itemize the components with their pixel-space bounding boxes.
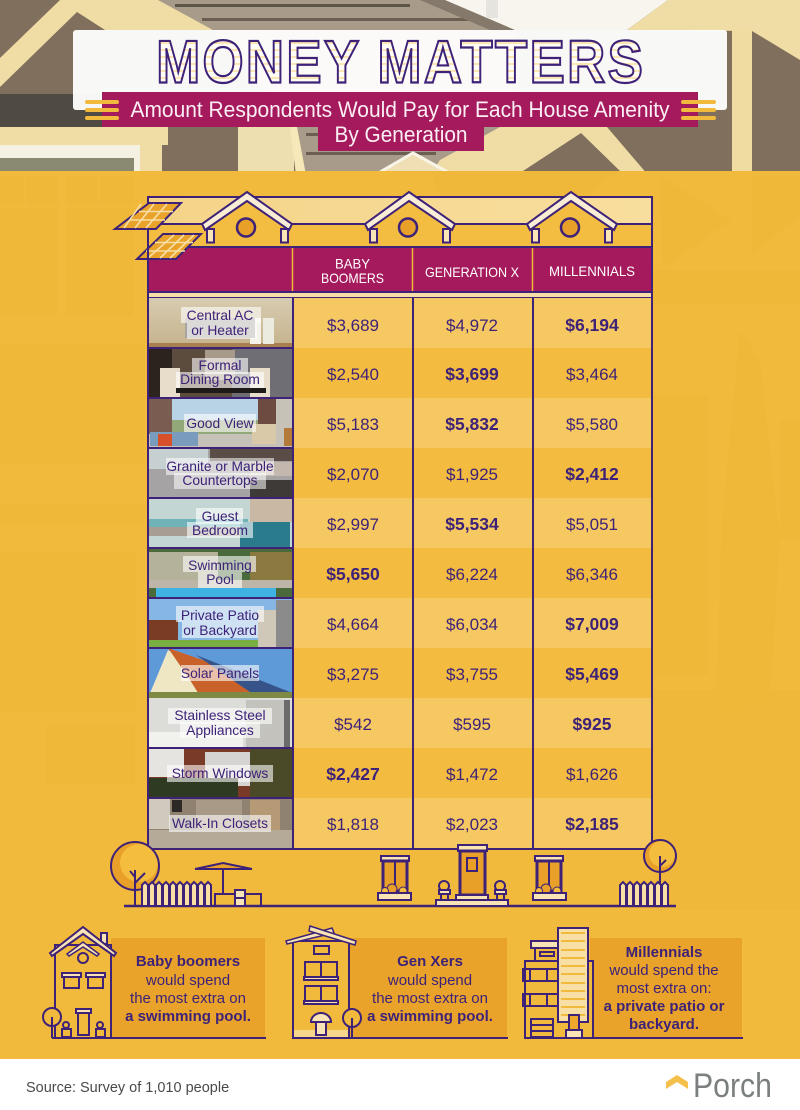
callout: baby boomers: a swimming pool. <box>125 1008 251 1025</box>
table values: $2,540 <box>327 365 379 384</box>
table values: $5,051 <box>566 515 618 534</box>
photo: swimming pool: Swimming <box>188 558 252 573</box>
table values: $5,183 <box>327 415 379 434</box>
table values: $595 <box>453 715 491 734</box>
table values: $7,009 <box>565 614 619 634</box>
ground line <box>124 905 676 907</box>
subtitle banner: Amount Respondents Would Pay for Each House Amenity <box>130 97 670 122</box>
table values: $1,626 <box>566 765 618 784</box>
icon: baby boomer house <box>43 927 116 1038</box>
table values: $3,464 <box>566 365 618 384</box>
callout: baby boomers <box>52 938 266 1038</box>
table values: $4,664 <box>327 615 379 634</box>
table row backgrounds <box>293 298 653 848</box>
callout: gen xers: the most extra on <box>372 990 488 1007</box>
photo: granite or marble countertops: Countertops <box>182 473 258 488</box>
background photo: house roof <box>0 0 800 175</box>
photo: swimming pool: Pool <box>206 572 234 587</box>
callout: millennials: would spend the <box>608 962 719 979</box>
dormer 1 <box>202 192 292 246</box>
table header: GENERATION X <box>425 264 520 280</box>
table values: $6,224 <box>446 565 498 584</box>
photo: central AC: or Heater <box>191 323 249 338</box>
subtitle banner: By Generation <box>334 122 468 147</box>
table values: $2,427 <box>326 764 380 784</box>
photo: good view: Good View <box>186 416 254 431</box>
icon: right fence <box>620 882 668 906</box>
photo: granite or marble countertops <box>148 448 293 498</box>
title plate <box>73 30 727 110</box>
photo: walk-in closets: Walk-In Closets <box>172 816 268 831</box>
photo: solar panels: Solar Panels <box>181 666 259 681</box>
photo: stainless steel appliances <box>148 698 293 748</box>
table values: $2,185 <box>565 814 619 834</box>
photo: walk-in closets <box>148 798 293 848</box>
table values: $6,194 <box>565 315 619 335</box>
callout: gen xers: a swimming pool. <box>367 1008 493 1025</box>
source note: Source: Survey of 1,010 people <box>26 1080 229 1096</box>
table values: $2,023 <box>446 815 498 834</box>
icon: front door <box>436 845 508 906</box>
photo: central AC: Central AC <box>187 308 253 323</box>
table values: $5,650 <box>326 564 380 584</box>
callout: millennials: backyard. <box>629 1016 699 1033</box>
table values: $925 <box>573 714 612 734</box>
icon: window box 2 <box>533 856 566 900</box>
icon: millennial building <box>523 928 593 1038</box>
table values: $1,472 <box>446 765 498 784</box>
photo: storm windows: Storm Windows <box>172 766 268 781</box>
photo: guest bedroom <box>148 498 293 548</box>
table values: $4,972 <box>446 316 498 335</box>
title: MONEY MATTERS <box>156 28 643 95</box>
table values: $1,925 <box>446 465 498 484</box>
dormer 3 <box>527 192 617 246</box>
table values: $6,034 <box>446 615 498 634</box>
photo: private patio or backyard <box>148 598 293 648</box>
subtitle banner <box>102 92 698 151</box>
table values: $3,699 <box>445 364 499 384</box>
callout: millennials: a private patio or <box>604 998 725 1015</box>
banner stripes right <box>681 100 716 120</box>
icon: window box 1 <box>378 856 411 900</box>
photo: good view <box>148 398 293 448</box>
photo: storm windows <box>148 748 293 798</box>
photo: stainless steel appliances: Stainless Steel <box>174 708 266 723</box>
table values: $2,070 <box>327 465 379 484</box>
table header: MILLENNIALS <box>549 263 635 279</box>
yellow background panel <box>0 171 800 1059</box>
photo: swimming pool <box>148 548 293 598</box>
table values: $5,580 <box>566 415 618 434</box>
table header: BABY <box>335 256 371 272</box>
icon: umbrella and pool <box>195 863 261 906</box>
photo: formal dining room: Formal <box>199 358 241 373</box>
table values: $2,997 <box>327 515 379 534</box>
photo: stainless steel appliances: Appliances <box>186 723 254 738</box>
table header <box>147 247 653 298</box>
callout: millennials <box>525 938 743 1038</box>
table values: $3,755 <box>446 665 498 684</box>
Porch logo: Porch <box>693 1067 772 1105</box>
table values: $2,412 <box>565 464 619 484</box>
photo: solar panels <box>148 648 293 698</box>
table values: $5,832 <box>445 414 499 434</box>
photo: guest bedroom: Guest <box>202 509 239 524</box>
photo: formal dining room: Dining Room <box>180 372 260 387</box>
dormer 2 <box>365 192 455 246</box>
icon: left tree <box>111 842 159 906</box>
callout: baby boomers: would spend <box>145 972 230 989</box>
photo: private patio or backyard: or Backyard <box>183 623 257 638</box>
callout: baby boomers: the most extra on <box>130 990 246 1007</box>
icon: solar panel 2 <box>137 234 201 259</box>
table values: $1,818 <box>327 815 379 834</box>
callout: gen xers: would spend <box>387 972 472 989</box>
photo: granite or marble countertops: Granite or Marble <box>166 459 274 474</box>
photo: central AC <box>148 298 293 348</box>
table values: $3,275 <box>327 665 379 684</box>
callout: baby boomers: Baby boomers <box>136 953 240 970</box>
icon: gen x house <box>286 926 361 1038</box>
table header: BOOMERS <box>321 270 384 286</box>
table values: $6,346 <box>566 565 618 584</box>
icon: left fence <box>142 882 211 906</box>
photo: private patio or backyard: Private Patio <box>181 608 259 623</box>
icon: planters <box>439 881 506 900</box>
roof of table house <box>148 197 652 247</box>
Porch logo <box>666 1067 772 1105</box>
icon: right tree <box>644 840 676 884</box>
table grid lines <box>147 246 653 849</box>
table values: $5,534 <box>445 514 499 534</box>
callout: millennials: most extra on: <box>616 980 712 997</box>
table values: $3,689 <box>327 316 379 335</box>
callout: gen xers: Gen Xers <box>397 953 463 970</box>
photo: formal dining room <box>148 348 293 398</box>
table values <box>326 315 619 834</box>
table values: $5,469 <box>565 664 619 684</box>
table values: $542 <box>334 715 372 734</box>
callout: millennials: Millennials <box>626 944 702 961</box>
banner stripes left <box>85 100 119 120</box>
photo: guest bedroom: Bedroom <box>192 523 248 538</box>
callout: gen xers <box>293 938 508 1038</box>
icon: solar panel 1 <box>115 203 181 229</box>
